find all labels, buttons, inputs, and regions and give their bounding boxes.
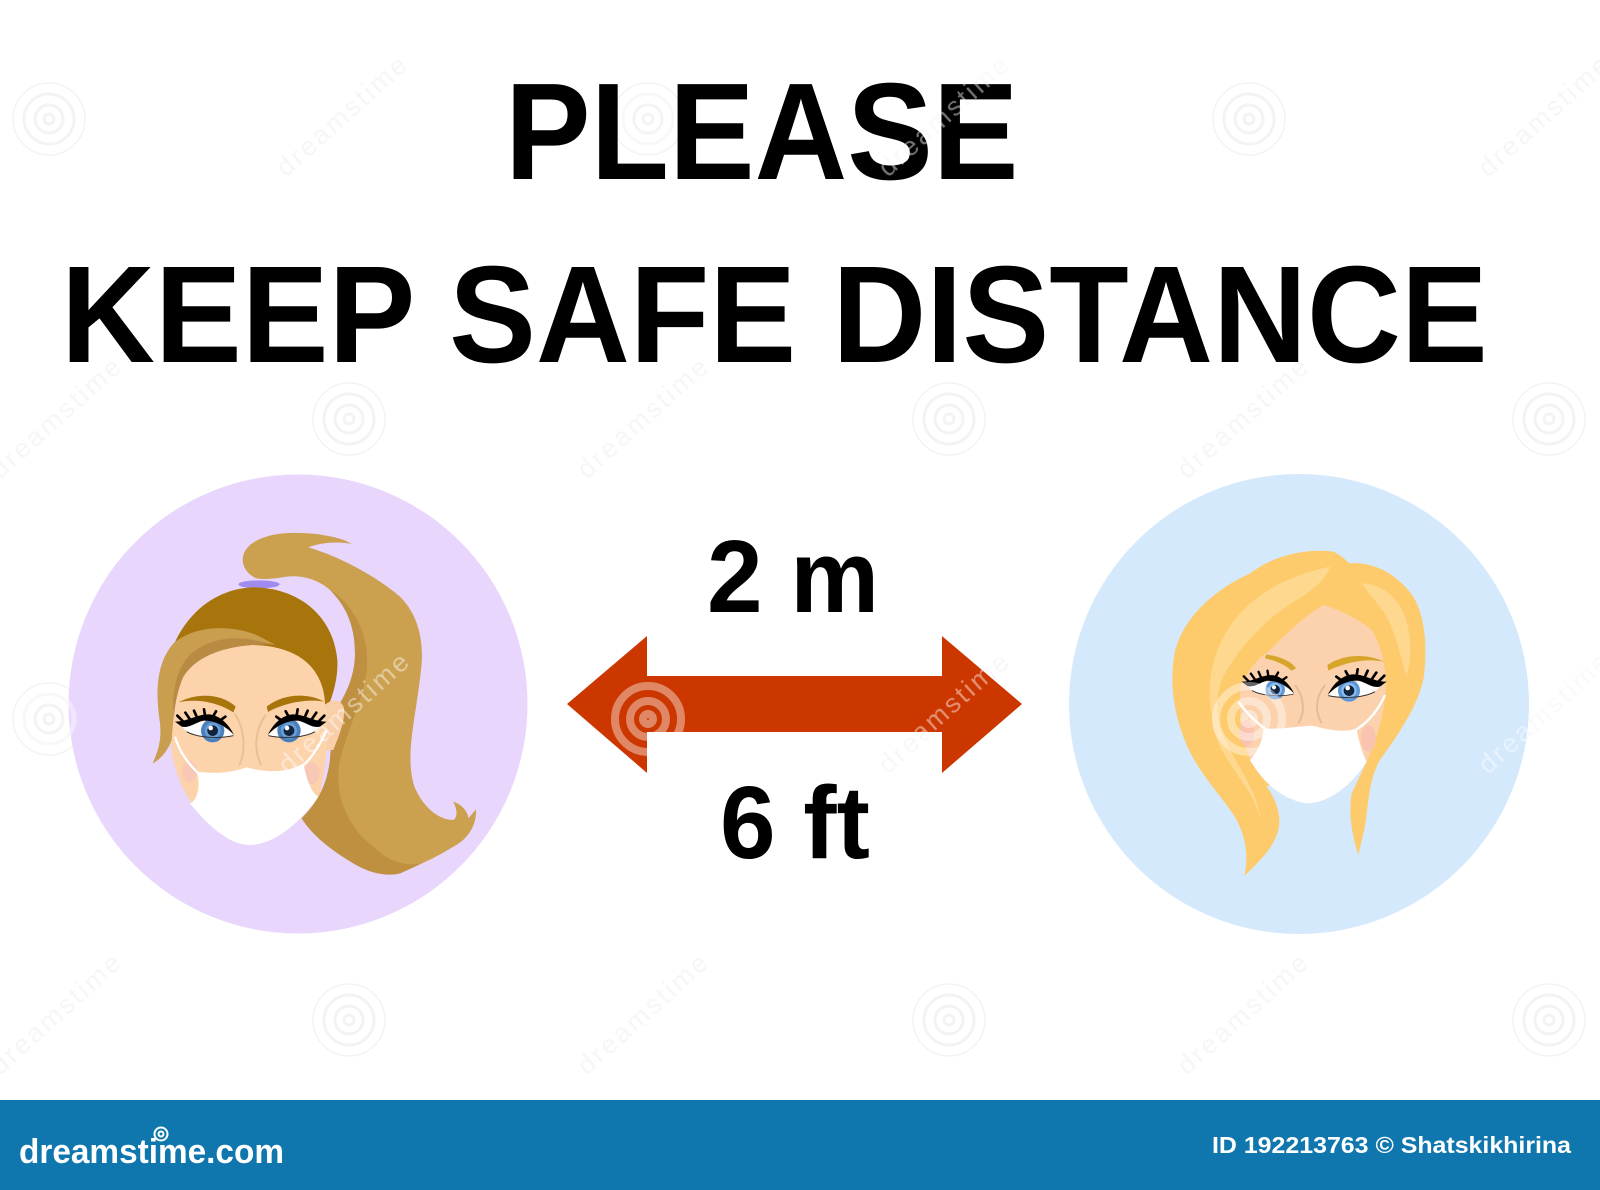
hair highlights: [1210, 567, 1330, 820]
ear: [323, 701, 344, 750]
brows: [1265, 655, 1296, 671]
face: [171, 645, 327, 842]
nose lines: [1295, 685, 1303, 723]
bangs: [153, 628, 275, 763]
nose lines: [234, 713, 244, 765]
left eye: [1242, 671, 1294, 699]
faint watermark text on white: dreamstime: [571, 948, 714, 1080]
circle background blue: [1069, 474, 1529, 934]
footer credit: ID 192213763 © Shatskikhirina: [1212, 1132, 1571, 1158]
label: 6 ft: 6 ft: [720, 765, 870, 880]
brow left: [178, 696, 236, 712]
title line: please: PLEASE: [505, 55, 1018, 209]
illustration: blonde woman face: [1172, 551, 1425, 876]
face: [1240, 605, 1386, 803]
watermark overlay text: dreamstime: [272, 647, 415, 779]
ponytail: [243, 533, 476, 875]
watermark overlay text: dreamstime: [870, 647, 1013, 779]
illustration: ponytail woman face: [153, 533, 476, 875]
faint watermark text on white: dreamstime: [1171, 352, 1314, 484]
faint watermark text on white: dreamstime: [872, 50, 1015, 182]
mask: [1250, 726, 1367, 803]
left eye: [175, 709, 234, 742]
icon: logo spiral: [154, 1128, 168, 1140]
watermark overlay text: [272, 50, 1600, 779]
hair band: [238, 580, 280, 588]
hair top: [172, 587, 337, 713]
title line: keep safe distance: KEEP SAFE DISTANCE: [61, 239, 1488, 392]
footer bar: [0, 1100, 1600, 1190]
arrow: double headed red: [567, 636, 1022, 773]
ponytail shadow: [302, 590, 420, 875]
mask straps: [175, 730, 327, 773]
faint watermark text on white: dreamstime: [872, 647, 1015, 779]
panel: woman with ponytail: [68, 474, 528, 934]
hair: [1172, 551, 1425, 876]
faint watermark text on white: dreamstime: [571, 352, 714, 484]
panel: blonde woman: [1069, 474, 1529, 934]
title: [61, 55, 1488, 392]
circle background lilac: [68, 474, 528, 934]
watermark overlay spirals: [24, 94, 1282, 752]
right eye: [1328, 669, 1387, 702]
faint watermark text on white: dreamstime: [1171, 948, 1314, 1080]
mask straps: [1238, 695, 1385, 730]
brow right: [267, 696, 324, 712]
right eye: [268, 709, 327, 742]
watermark overlay text: dreamstime: [872, 50, 1015, 182]
mask: [190, 763, 318, 845]
blush: [1239, 720, 1254, 747]
bangs shadow: [173, 638, 275, 717]
label: 2 m: 2 m: [707, 519, 879, 634]
blush: [182, 761, 197, 782]
faint watermark text on white: dreamstime: [270, 50, 413, 182]
footer logo text: dreamstime.com: [19, 1133, 284, 1171]
